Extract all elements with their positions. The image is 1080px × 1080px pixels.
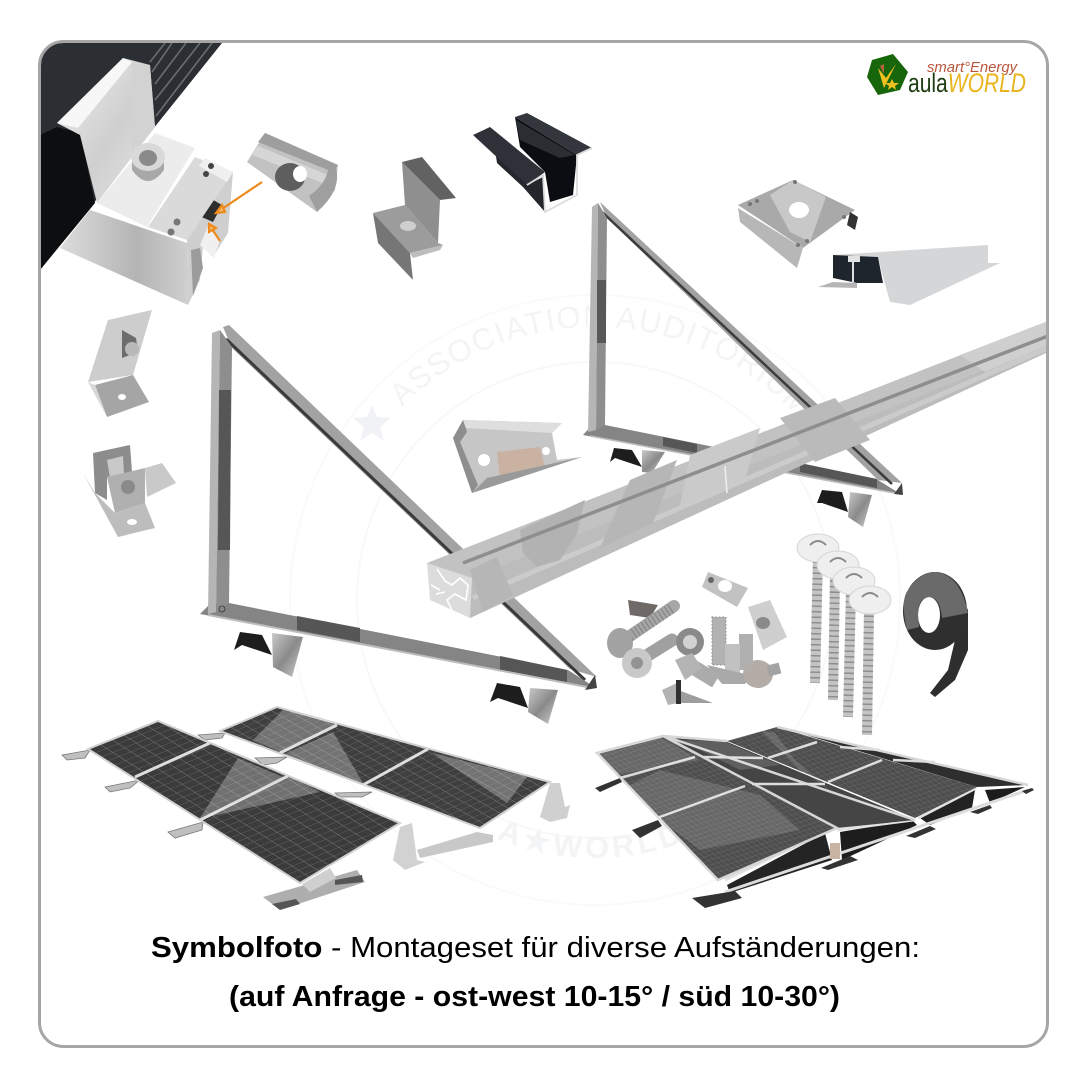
socket bolts xyxy=(607,600,674,678)
rail end face xyxy=(427,563,472,618)
icon: black end clamp xyxy=(473,113,592,212)
small T-nuts xyxy=(702,572,787,650)
panel: right solar array xyxy=(595,727,1034,908)
corner xyxy=(894,483,903,495)
corner xyxy=(585,675,597,690)
studs and nut xyxy=(676,617,753,684)
bottom bar xyxy=(200,603,596,688)
icon: angle bracket lower xyxy=(83,445,176,537)
panel: large triangular mount frame xyxy=(200,325,597,724)
clamp plate and bolt xyxy=(57,58,195,227)
icon: sealing tape roll xyxy=(903,572,968,697)
logo wordmark: aulaWORLD xyxy=(908,68,1026,98)
front pedestal bar xyxy=(263,868,365,910)
feet xyxy=(234,632,558,724)
watermark: A★WORLD A xyxy=(497,822,678,858)
watermark xyxy=(354,306,804,858)
caption xyxy=(151,932,920,1013)
back row modules xyxy=(220,707,550,828)
logo xyxy=(867,54,1026,98)
watermark overlay on modules xyxy=(200,710,527,818)
center pedestal and connecting bar xyxy=(393,823,493,870)
icon: angle bracket upper xyxy=(88,310,152,417)
panel: mounted clamp photo xyxy=(40,43,338,305)
icon: washer head screws xyxy=(797,534,891,735)
vertical bar xyxy=(208,330,220,614)
front row modules xyxy=(88,721,400,883)
icon: roof rail piece xyxy=(818,245,1000,305)
arrows xyxy=(209,182,262,241)
caption line 1: Symbolfoto - Montageset für diverse Aufständerungen: xyxy=(151,932,920,964)
rear pedestal xyxy=(540,783,570,822)
icon: short channel bracket xyxy=(453,420,582,493)
watermark: ASSOCIATION AUDITORIUM xyxy=(394,306,804,411)
icon: fasteners group xyxy=(607,572,787,705)
rail body xyxy=(60,157,233,305)
vertical bar xyxy=(588,203,598,432)
icon: Z bracket xyxy=(373,157,456,280)
panel: left solar array xyxy=(62,707,570,910)
modules xyxy=(597,727,1028,880)
icon: roof bracket plate xyxy=(738,180,858,268)
icon: logo hexagon xyxy=(867,54,908,95)
dark solar module corner xyxy=(40,43,222,270)
watermark overlay on modules xyxy=(597,730,830,850)
feet xyxy=(610,448,872,527)
hypotenuse xyxy=(600,202,902,483)
logo tagline: smart°Energy xyxy=(927,59,1018,76)
ballast feet xyxy=(62,733,372,838)
hex bolts and tapping screw xyxy=(662,653,780,705)
long aluminium profile rail xyxy=(427,321,1048,618)
support structure xyxy=(595,778,1034,908)
panel: small triangular mount frame xyxy=(583,202,903,527)
T-nut xyxy=(247,133,338,212)
caption line 2: (auf Anfrage - ost-west 10-15° / süd 10-30°) xyxy=(229,981,840,1013)
rail watermark bands xyxy=(470,321,1048,612)
bottom bar xyxy=(583,425,902,495)
hypotenuse xyxy=(223,325,597,677)
